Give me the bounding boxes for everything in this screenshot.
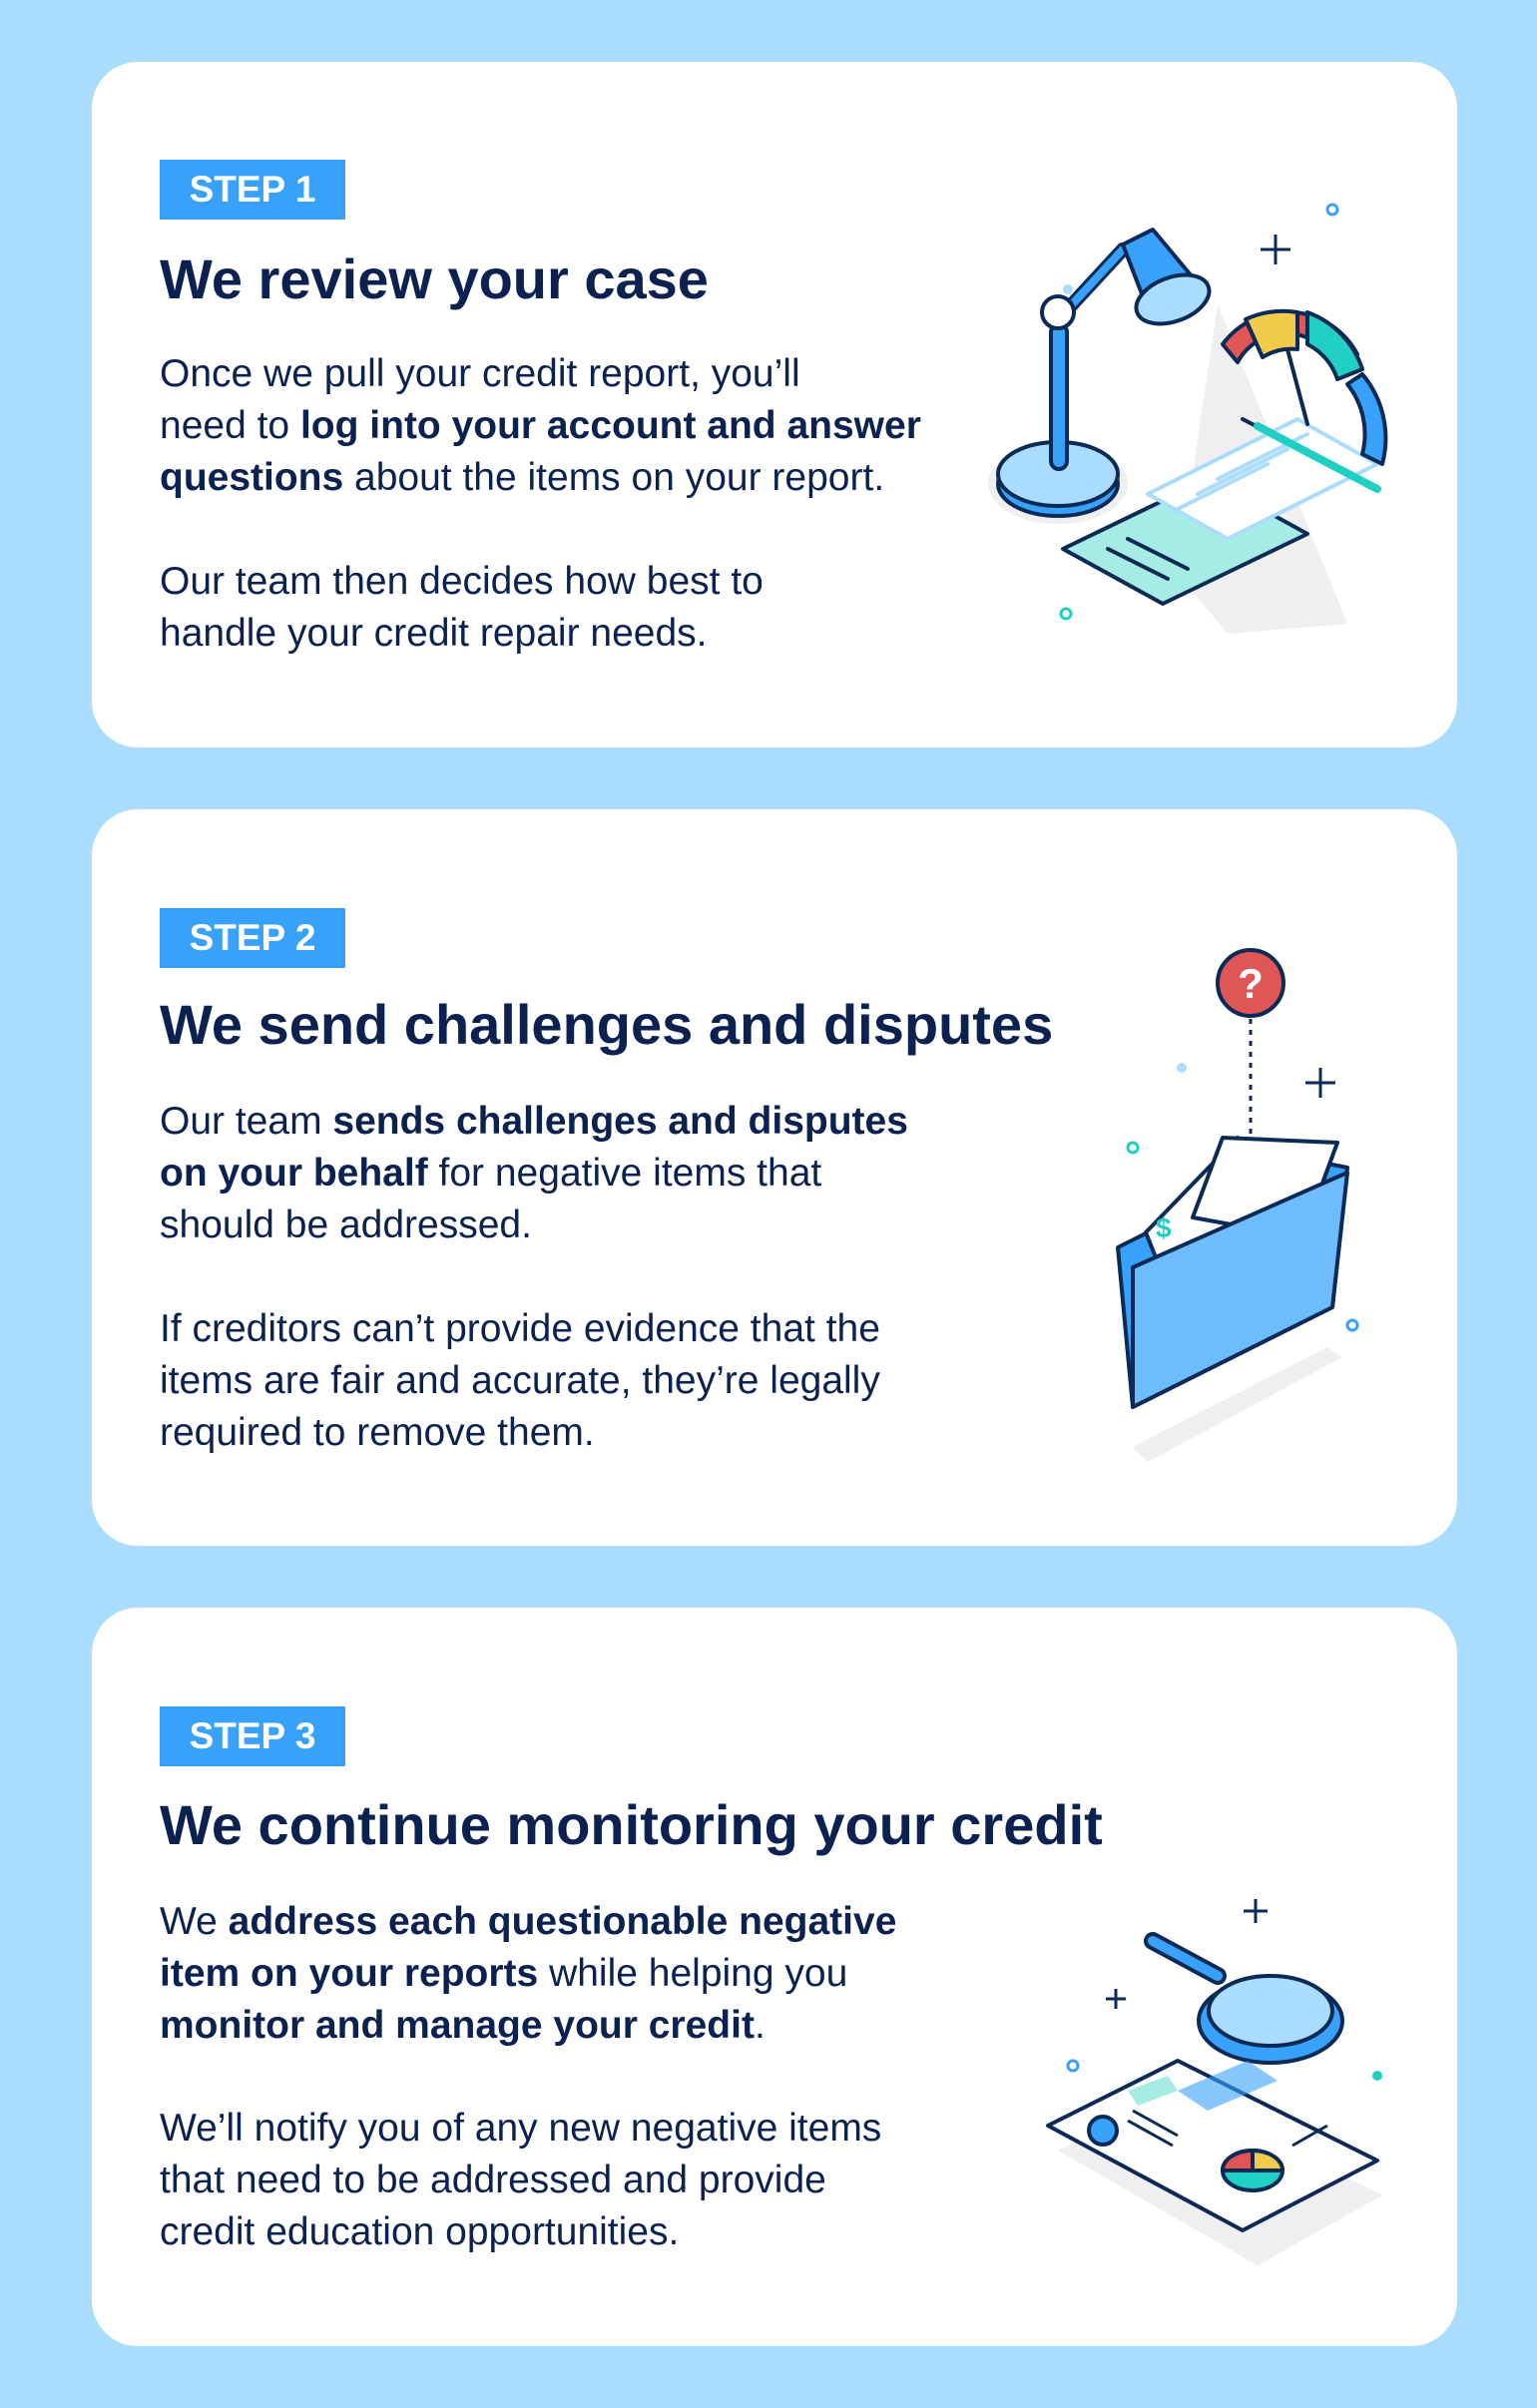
text block: step 3 para 1: We address each questionable negative (160, 1900, 896, 1943)
badge: step 2 (160, 908, 345, 968)
text block: step 3 para 2: We’ll notify you of any new negative items (160, 2107, 881, 2150)
text block: step 2 para 2 (160, 1307, 880, 1454)
text block: step 1 para 2: handle your credit repair needs. (160, 612, 707, 655)
heading: step 1: We review your case (160, 247, 709, 310)
panel: step 3 (92, 1608, 1457, 2346)
heading: step 2: We send challenges and disputes (160, 993, 1053, 1056)
text block: step 1 para 2: Our team then decides how best to (160, 560, 764, 603)
text block: step 1 para 1: Once we pull your credit report, you’ll (160, 352, 800, 395)
text block: step 2 para 2: If creditors can’t provide evidence that the (160, 1307, 880, 1350)
badge: step 3 (160, 1706, 345, 1766)
text block: step 2 para 1: on your behalf for negative items that (160, 1152, 821, 1195)
text block: step 2 para 1: Our team sends challenges and disputes (160, 1100, 908, 1143)
illustration: folder with question mark (1116, 948, 1359, 1462)
text block: step 2 para 2: items are fair and accurate, they’re legally (160, 1359, 880, 1402)
illustration: folder with question mark: $ (1156, 1212, 1172, 1243)
text block: step 3 para 1: monitor and manage your credit. (160, 2004, 766, 2047)
text block: step 1 para 1: questions about the items on your report. (160, 456, 884, 499)
text block: step 1 para 1 (160, 352, 921, 499)
text block: step 1 para 2 (160, 560, 764, 655)
panel: step 2 (92, 809, 1457, 1546)
illustration: folder with question mark: ? (1238, 960, 1264, 1007)
text block: step 3 para 1 (160, 1900, 896, 2047)
heading: step 3: We continue monitoring your credit (160, 1793, 1103, 1856)
illustration: lamp and credit meter (988, 204, 1387, 634)
illustration: magnifier over report (1046, 1899, 1382, 2265)
text block: step 2 para 1 (160, 1100, 908, 1246)
text block: step 3 para 2: that need to be addressed and provide (160, 2159, 826, 2201)
badge: step 1 (160, 160, 345, 220)
text block: step 2 para 1: should be addressed. (160, 1204, 532, 1246)
badge: step 2: STEP 2 (190, 917, 315, 958)
text block: step 2 para 2: required to remove them. (160, 1411, 595, 1454)
text block: step 3 para 2 (160, 2107, 881, 2253)
text block: step 1 para 1: need to log into your account and answer (160, 404, 921, 447)
text block: step 3 para 1: item on your reports while helping you (160, 1952, 847, 1995)
badge: step 3: STEP 3 (190, 1715, 315, 1756)
text block: step 3 para 2: credit education opportunities. (160, 2210, 679, 2253)
badge: step 1: STEP 1 (190, 169, 315, 210)
panel: step 1 (92, 62, 1457, 747)
